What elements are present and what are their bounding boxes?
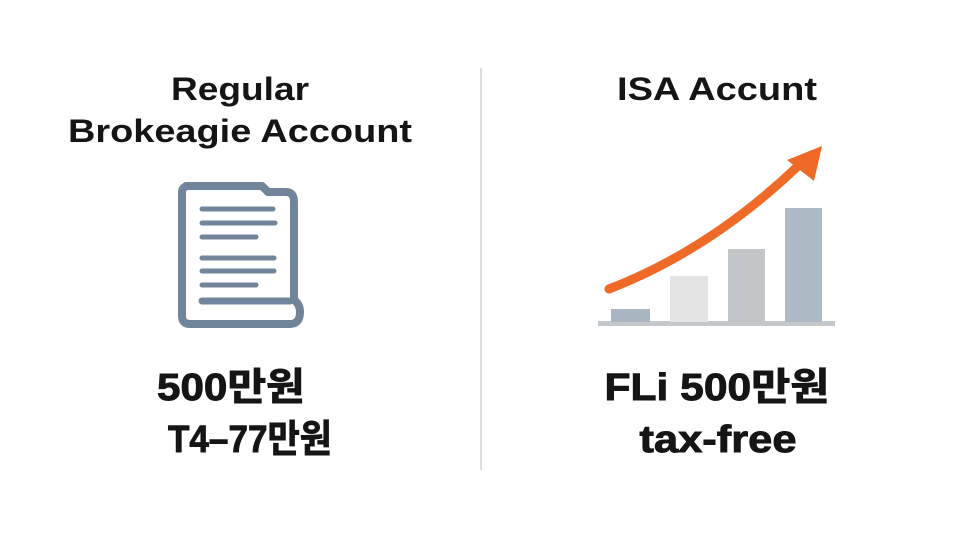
text: amounts: 500만원 — [157, 367, 305, 409]
icon: document — [182, 186, 300, 324]
text: amounts — [157, 367, 332, 461]
panel: regular brokerage account — [68, 71, 412, 461]
chart: rising bars with arrow — [598, 146, 835, 326]
panel: ISA account — [598, 71, 835, 461]
text: ISA amounts: tax-free — [640, 419, 796, 461]
title: ISA account: ISA Accunt — [617, 71, 817, 107]
arrow — [609, 146, 822, 289]
text: ISA amounts: FLi 500만원 — [604, 367, 830, 409]
title: regular brokerage account — [68, 71, 412, 149]
text: amounts: T4–77만원 — [168, 419, 332, 461]
text: ISA amounts — [604, 367, 830, 461]
title: regular brokerage account: Brokeagie Account — [68, 113, 412, 149]
title: regular brokerage account: Regular — [171, 71, 309, 107]
